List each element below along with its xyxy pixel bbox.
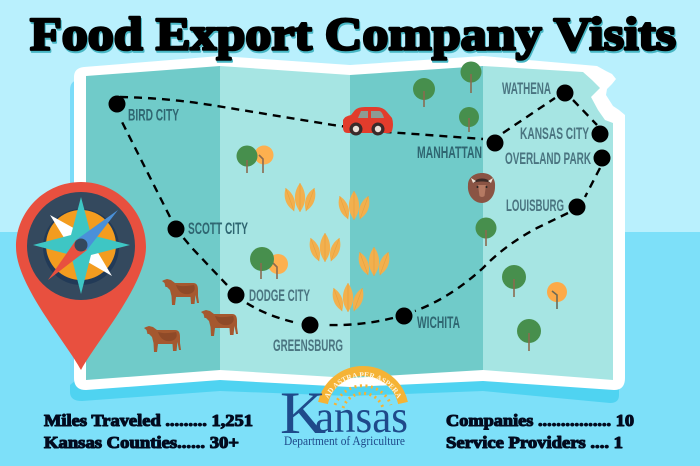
map panel 2 xyxy=(220,66,350,378)
city labels: KANSAS CITY xyxy=(520,125,589,143)
map panel 3 xyxy=(350,66,483,378)
compass star xyxy=(33,197,130,294)
map panel 4 xyxy=(483,66,613,380)
bison xyxy=(468,173,495,203)
route stops xyxy=(108,84,610,334)
logo ansas: ansas xyxy=(315,391,408,443)
compass orange face xyxy=(46,210,116,280)
stats left: Miles Traveled ......... 1,251 xyxy=(44,411,253,430)
wheat xyxy=(282,183,392,313)
map panel 1 xyxy=(86,66,220,380)
map shadow xyxy=(70,66,619,403)
city labels: DODGE CITY xyxy=(249,287,310,305)
route: dashed line xyxy=(120,97,600,325)
logo: Kansas Department of Agriculture xyxy=(280,366,408,448)
city labels: BIRD CITY xyxy=(128,106,179,124)
stats left xyxy=(44,411,253,452)
city labels xyxy=(128,80,591,355)
lower water background xyxy=(0,232,700,466)
logo K: K xyxy=(280,380,326,446)
compass dial xyxy=(27,192,135,300)
compass pin xyxy=(16,182,146,370)
title: Food Export Company Visits xyxy=(30,8,676,60)
compass blue needle xyxy=(76,210,118,250)
city labels: GREENSBURG xyxy=(273,337,343,355)
title shadow: Food Export Company Visits xyxy=(31,10,677,62)
car xyxy=(343,107,393,136)
compass white diagonal points xyxy=(50,215,112,276)
city labels: OVERLAND PARK xyxy=(505,150,591,168)
compass hub xyxy=(74,238,88,252)
city labels: LOUISBURG xyxy=(506,197,564,215)
trees xyxy=(236,62,567,351)
cows xyxy=(144,279,238,352)
map: white border xyxy=(74,56,625,390)
sky background xyxy=(0,0,700,232)
stats right: Service Providers .... 1 xyxy=(446,433,623,452)
stats right: Companies ................ 10 xyxy=(446,411,634,430)
compass inner ring xyxy=(43,209,119,285)
pin body xyxy=(16,182,146,370)
logo department: Department of Agriculture xyxy=(284,434,405,448)
stats left: Kansas Counties...... 30+ xyxy=(44,433,239,452)
stats right xyxy=(446,411,634,452)
logo motto: AD ASTRA PER ASPERA xyxy=(325,372,401,399)
city labels: WICHITA xyxy=(417,314,460,332)
logo arc xyxy=(323,371,403,403)
city labels: MANHATTAN xyxy=(417,144,482,162)
map lower shadow band xyxy=(70,370,619,403)
logo wheat dots xyxy=(335,386,391,408)
city labels: SCOTT CITY xyxy=(188,220,248,238)
city labels: WATHENA xyxy=(502,80,551,98)
compass red needle xyxy=(48,240,87,280)
